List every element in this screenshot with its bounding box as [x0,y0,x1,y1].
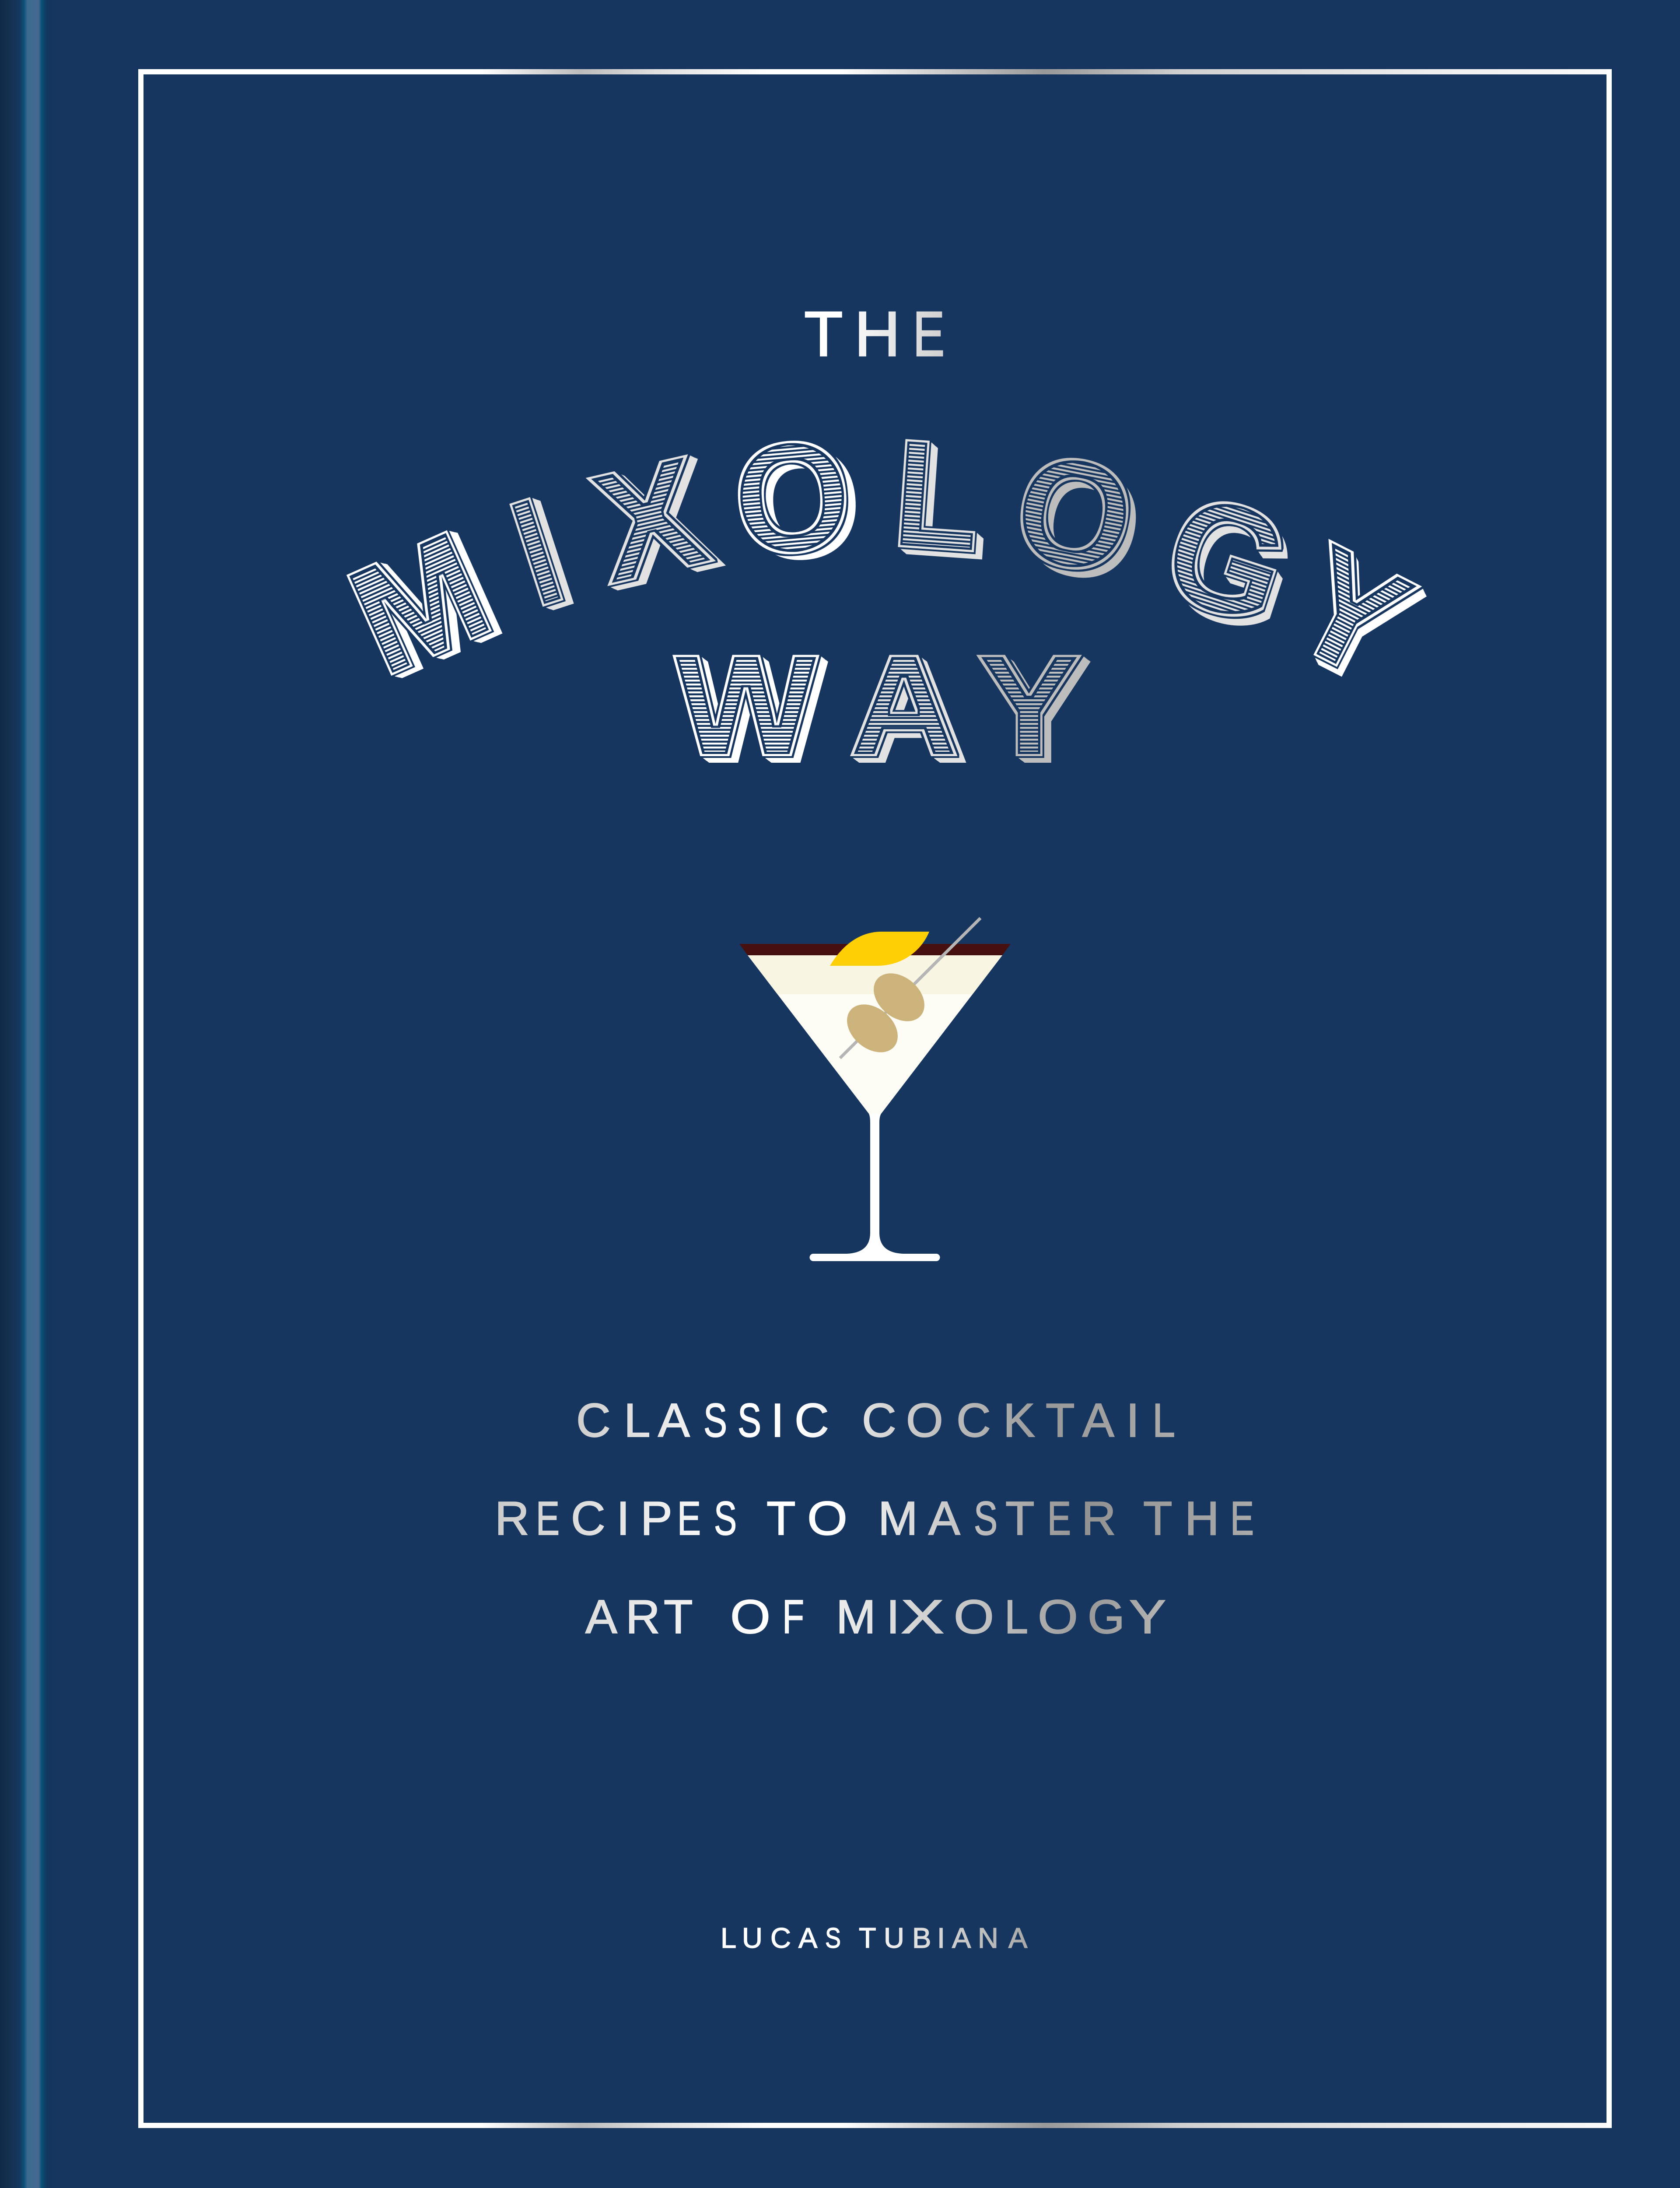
title: WAY [676,627,1080,784]
subtitle [495,1394,1254,1644]
lemon peel [830,932,929,966]
icon: martini glass [739,918,1011,1261]
subtitle line 2: RECIPES TO MA ST ER THE [495,1492,1254,1545]
title: WAY: Y [978,627,1080,784]
title: MIXOLOGY arched: L [889,409,986,582]
heading: THE: THE [804,298,945,369]
subtitle line 3: ART O F MIX O LO GY [585,1590,1166,1644]
title: MIXOLOGY arched: X [578,423,721,615]
title: WAY: A [850,627,958,784]
title: MIXOLOGY arched: M [326,498,511,707]
title: MIXOLOGY arched: I [494,466,579,638]
title: MIXOLOGY arched: G [1145,459,1309,658]
author: LUCA S TUBIANA [721,1922,1028,1954]
title: MIXOLOGY arched: Y [1266,511,1435,712]
liquid [748,955,1002,1114]
title: MIXOLOGY arched [326,406,1435,712]
title: MIXOLOGY arched: O [1002,420,1147,608]
olive lower [838,995,907,1062]
title: MIXOLOGY arched: O [727,406,858,588]
cocktail pick [840,918,980,1058]
book spine highlight [0,0,61,2188]
glass bowl and stem [748,955,1002,1261]
olive upper [864,964,934,1031]
subtitle line 1: CLA SSIC CO CKTAI L [576,1394,1175,1447]
dark rim [739,944,1011,955]
title: WAY: W [676,627,818,784]
liquid top band [748,955,1002,994]
